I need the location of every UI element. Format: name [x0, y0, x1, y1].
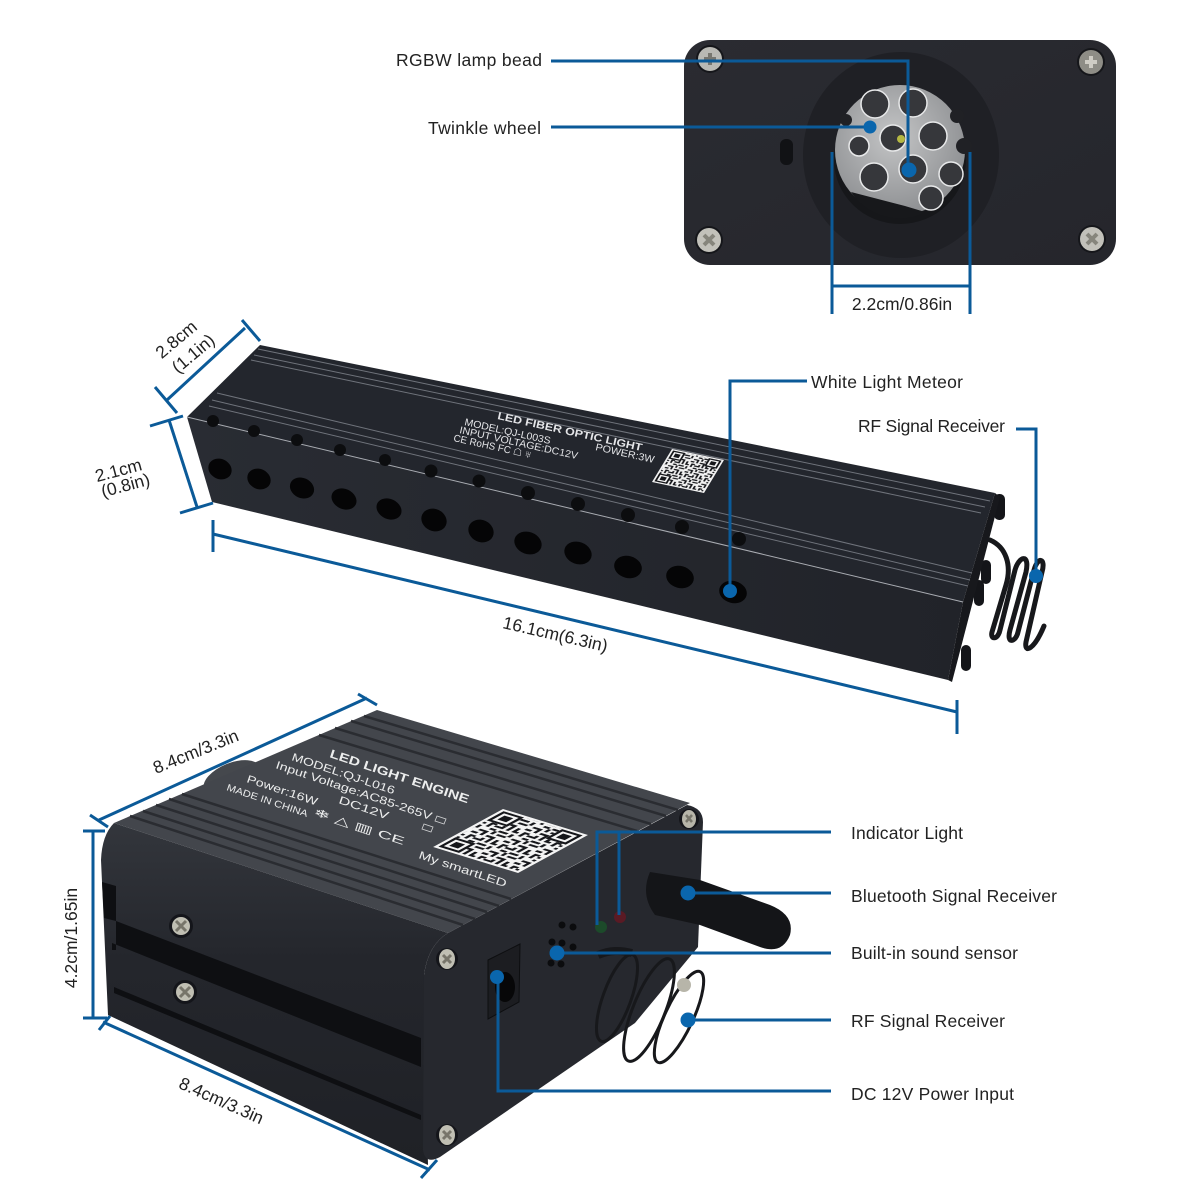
device label: My smartLED — [417, 849, 508, 890]
front face — [187, 417, 963, 680]
bluetooth antenna — [646, 872, 791, 949]
callout: DC 12V Power Input: DC 12V Power Input — [851, 1084, 1014, 1104]
set screws — [207, 415, 746, 546]
device label: INPUT VOLTAGE:DC12V — [458, 425, 579, 462]
callout: RF Signal Receiver on box — [680, 1011, 1005, 1031]
dimension: bar length — [213, 520, 957, 734]
side grooves — [102, 882, 421, 1120]
device label: CE RoHS FC ☖ ♅ — [452, 433, 533, 461]
callout: DC 12V Power Input — [490, 970, 1014, 1104]
callout: Built-in sound sensor: Built-in sound sensor — [851, 943, 1018, 963]
callout: Indicator Light — [597, 823, 963, 925]
sensor holes — [548, 922, 576, 968]
end face edge — [948, 493, 1000, 682]
dimension: bar height: 2.1cm — [93, 454, 144, 486]
lens boss — [803, 52, 999, 258]
top face — [114, 710, 690, 933]
device label: MADE IN CHINA — [225, 782, 310, 820]
housing plate — [684, 40, 1116, 265]
QR code — [433, 809, 588, 873]
dimension: bar length: 16.1cm(6.3in) — [501, 612, 610, 656]
dimension: box height — [61, 831, 107, 1018]
panel: light engine box — [101, 710, 791, 1165]
device label: ❄ △ ▥ CE — [312, 806, 406, 848]
dimension: bar height: (0.8in) — [99, 469, 152, 501]
device label: Power:16W — [245, 773, 320, 809]
callout: RGBW lamp bead — [396, 50, 916, 178]
device label — [452, 410, 656, 466]
QR code — [652, 449, 724, 493]
left side face — [101, 823, 448, 1165]
device label — [225, 747, 508, 890]
dimension: bar width: 2.8cm — [151, 316, 201, 362]
callout: Twinkle wheel — [428, 118, 876, 138]
dimension: bar width — [151, 316, 260, 413]
right end face — [423, 805, 703, 1160]
callout: RF Signal Receiver on bar: RF Signal Receiver — [858, 416, 1005, 436]
callout: Bluetooth Signal Receiver: Bluetooth Signal Receiver — [851, 886, 1057, 906]
rear knob — [199, 753, 265, 803]
fiber ports — [205, 455, 749, 606]
LEDs — [595, 911, 626, 933]
dimension: wheel diameter — [832, 152, 970, 314]
panel: top end view of fiber optic light — [684, 40, 1116, 265]
dimension: box width top — [90, 694, 377, 827]
callout: RGBW lamp bead: RGBW lamp bead — [396, 50, 542, 70]
screws — [169, 809, 699, 1146]
device label: MODEL:QJ-L003S — [463, 417, 552, 447]
callout: Built-in sound sensor — [550, 943, 1018, 963]
side button — [780, 139, 793, 165]
top face — [187, 345, 995, 602]
dimension: box height: 4.2cm/1.65in — [61, 888, 81, 988]
device label: POWER:3W — [594, 442, 656, 466]
callout: RF Signal Receiver on bar — [858, 416, 1043, 583]
antenna coil — [990, 540, 1044, 649]
dimension: box depth: 8.4cm/3.3in — [176, 1073, 267, 1128]
twinkle wheel — [834, 85, 972, 224]
device label: LED LIGHT ENGINE — [328, 747, 471, 806]
callout: RF Signal Receiver on box: RF Signal Receiver — [851, 1011, 1005, 1031]
dimension: bar height — [93, 416, 213, 513]
dimension: wheel diameter: 2.2cm/0.86in — [852, 294, 952, 314]
dimension: box width top: 8.4cm/3.3in — [150, 725, 241, 778]
end bolts — [961, 494, 1005, 671]
device label: DC12V — [337, 794, 391, 823]
callout: Twinkle wheel: Twinkle wheel — [428, 118, 541, 138]
dimension: bar width: (1.1in) — [168, 330, 219, 377]
device label: Input Voltage:AC85-265V — [274, 759, 434, 823]
power jack — [488, 944, 520, 1019]
callout: White Light Meteor: White Light Meteor — [811, 372, 963, 392]
coil antenna — [588, 950, 713, 1068]
callout: White Light Meteor — [723, 372, 963, 598]
device label: LED FIBER OPTIC LIGHT — [496, 410, 644, 454]
ridges — [187, 349, 990, 602]
panel: long fiber optic light bar — [187, 345, 1044, 682]
callout: Bluetooth Signal Receiver — [680, 886, 1057, 906]
corner screws — [695, 45, 1106, 254]
top ridges — [130, 716, 678, 925]
device label: MODEL:QJ-L016 — [290, 751, 396, 797]
callout: Indicator Light: Indicator Light — [851, 823, 963, 843]
dimension: box depth — [99, 1016, 437, 1178]
